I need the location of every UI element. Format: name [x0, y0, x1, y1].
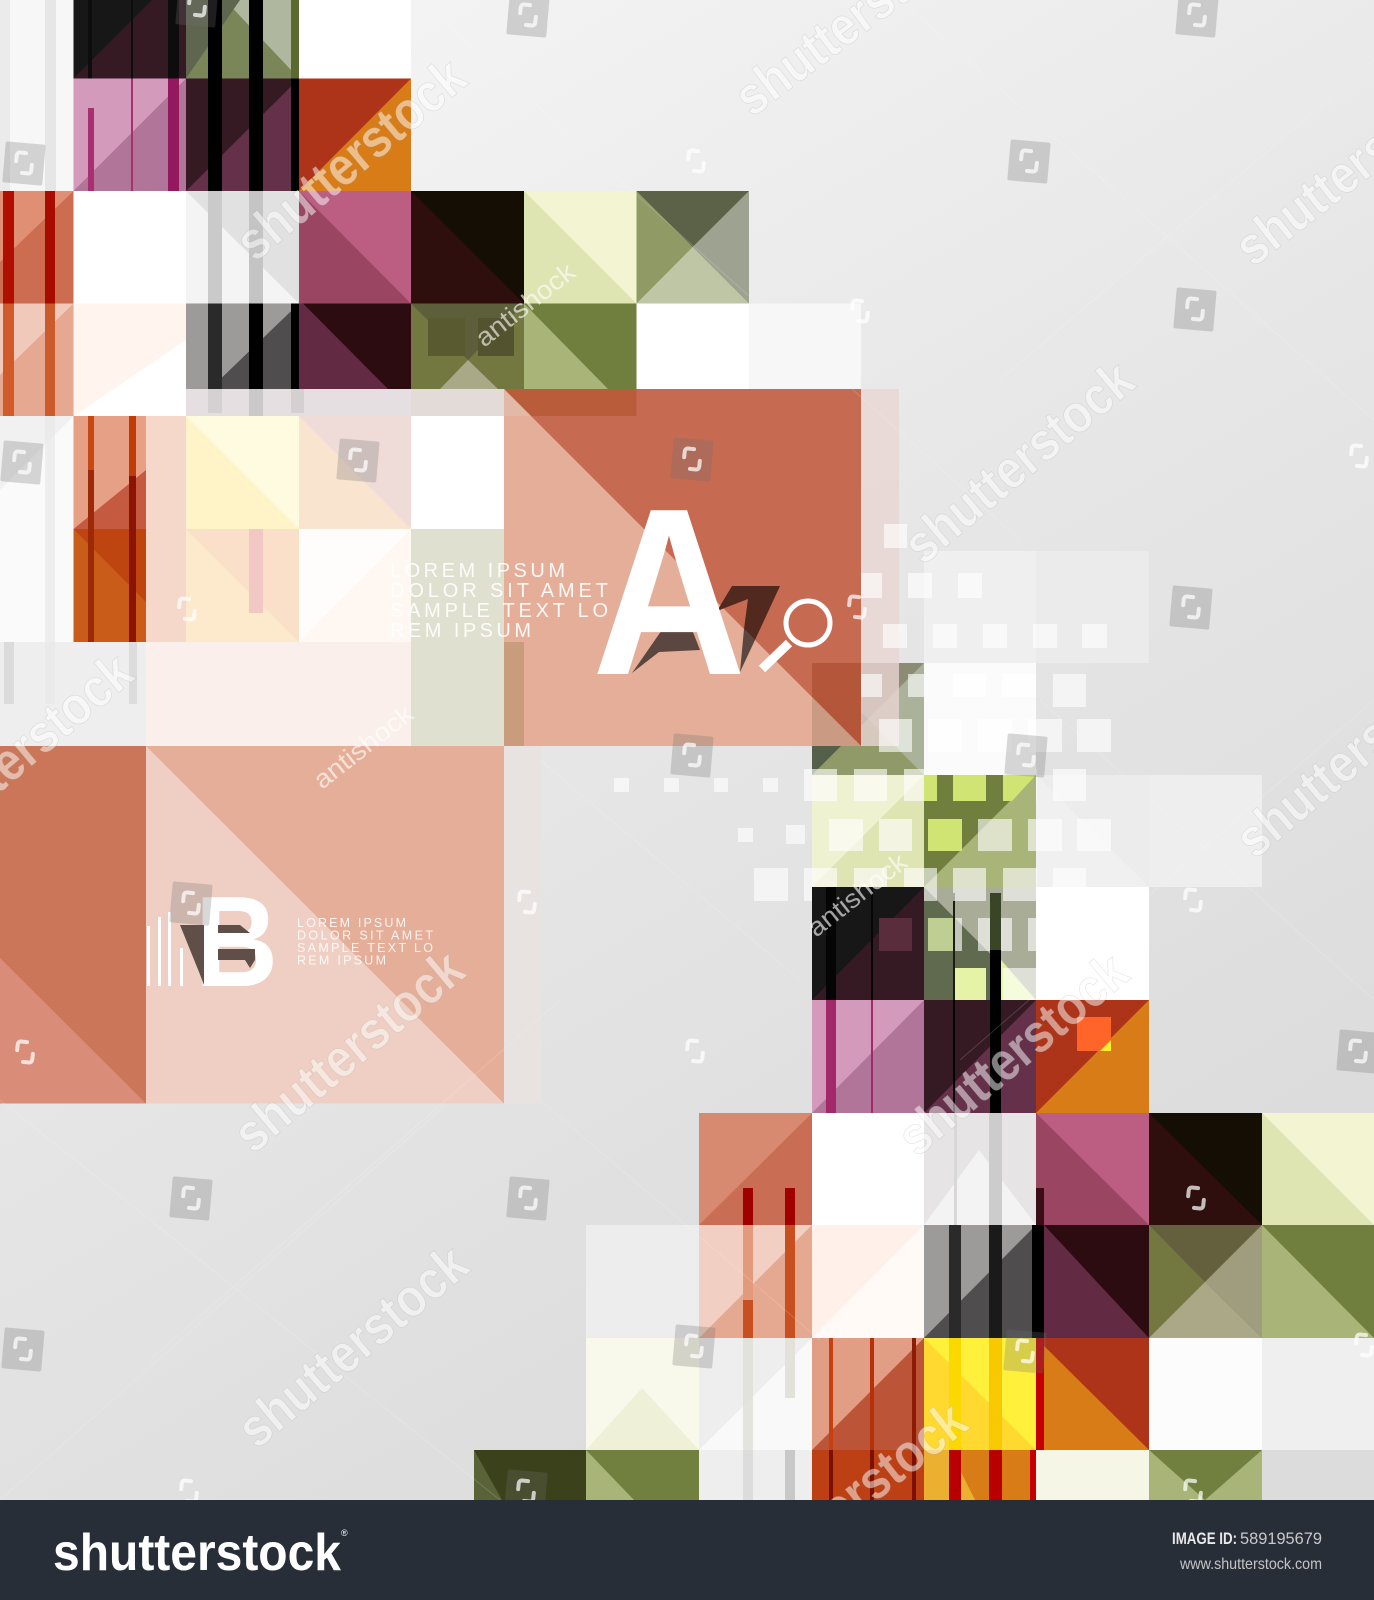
row 3 [586, 1338, 699, 1450]
cell: olive green [524, 304, 636, 389]
cell: pale lime [524, 191, 636, 304]
footer bar [0, 1500, 1374, 1600]
paragraph B: SAMPLE TEXT LO [297, 941, 433, 955]
cell: olive grey with stripes [924, 887, 1036, 1000]
icon: magnifier [762, 601, 830, 669]
image id: 589195679 [1240, 1529, 1322, 1548]
watermark: antishock text: antishock [307, 698, 420, 795]
cell: pink right [812, 1000, 924, 1113]
cell: black plum [74, 0, 186, 78]
paragraph B: DOLOR SIT AMET [297, 928, 433, 942]
ghost edge [504, 746, 541, 1104]
cell: near black [411, 191, 524, 304]
cell: plum [186, 78, 299, 191]
cell: orange column [74, 416, 146, 642]
letter A shadow [632, 586, 780, 673]
footer logo: shutterstock [53, 1524, 341, 1582]
letter B shadow [180, 925, 255, 985]
watermark: shutterstock text: shutterstock [892, 349, 1146, 575]
icon: speed lines [147, 912, 183, 986]
cell: pink [74, 78, 186, 191]
cell: coral stripes [0, 191, 74, 304]
paragraph A: SAMPLE TEXT LO [390, 600, 608, 622]
footer logo: ® [341, 1528, 348, 1538]
cell: cream [186, 416, 299, 529]
right dark cells [812, 887, 1149, 1113]
lime squares [924, 775, 1036, 851]
bottom right mosaic [474, 1113, 1374, 1500]
cell: olive ghost squares [411, 304, 524, 389]
watermark: shutterstock text: shutterstock [222, 938, 476, 1164]
right middle mosaic [812, 551, 1262, 1000]
watermark: shutterstock text: shutterstock [226, 1233, 480, 1459]
paragraph A [390, 560, 608, 642]
cell: salmon lower [0, 304, 74, 416]
upper left mosaic [0, 0, 861, 752]
paragraph B [297, 916, 433, 968]
website: www.shutterstock.com [1179, 1556, 1322, 1573]
translucent band [186, 389, 504, 416]
panel: letter A card [390, 389, 899, 753]
watermark: shutterstock text: shutterstock [886, 941, 1140, 1167]
cell: black plum right [812, 887, 924, 1000]
watermark: shutterstock text: shutterstock [224, 46, 478, 272]
watermark: antishock text [307, 256, 914, 943]
paragraph A: LOREM IPSUM [390, 560, 565, 582]
letter A: A [592, 460, 746, 725]
cell: grey stripes [186, 304, 304, 389]
image id: IMAGE ID: [1172, 1529, 1237, 1548]
watermark: antishock text: antishock [469, 256, 582, 353]
left lower tiles [0, 416, 146, 746]
panel: letter B card [0, 746, 541, 1104]
cell: pale grey [186, 191, 299, 304]
row 4 [474, 1450, 586, 1500]
cell: magenta [299, 191, 411, 304]
cell: orange [299, 78, 411, 191]
translucent square grid [614, 524, 1111, 1000]
cell: plum right [924, 1000, 1036, 1113]
ghost edge [861, 389, 899, 746]
pale squares [928, 918, 986, 1000]
letter B: B [195, 870, 278, 1014]
paragraph B: REM IPSUM [297, 954, 386, 968]
cell: pale lime right [812, 775, 924, 887]
cell: orange right [1036, 1000, 1149, 1113]
watermark: antishock text: antishock [801, 846, 914, 943]
cell: olive top [186, 0, 299, 78]
cell: olive right [924, 775, 1036, 887]
paragraph B: LOREM IPSUM [297, 916, 406, 930]
row 1 [699, 1113, 812, 1225]
paragraph A: DOLOR SIT AMET [390, 580, 608, 602]
cell: olive x [636, 191, 749, 304]
image id [1172, 1529, 1322, 1548]
row 2 [586, 1225, 699, 1338]
paragraph A: REM IPSUM [390, 620, 531, 642]
cell: dark plum [299, 304, 411, 389]
olive tile behind panel A [812, 663, 924, 775]
